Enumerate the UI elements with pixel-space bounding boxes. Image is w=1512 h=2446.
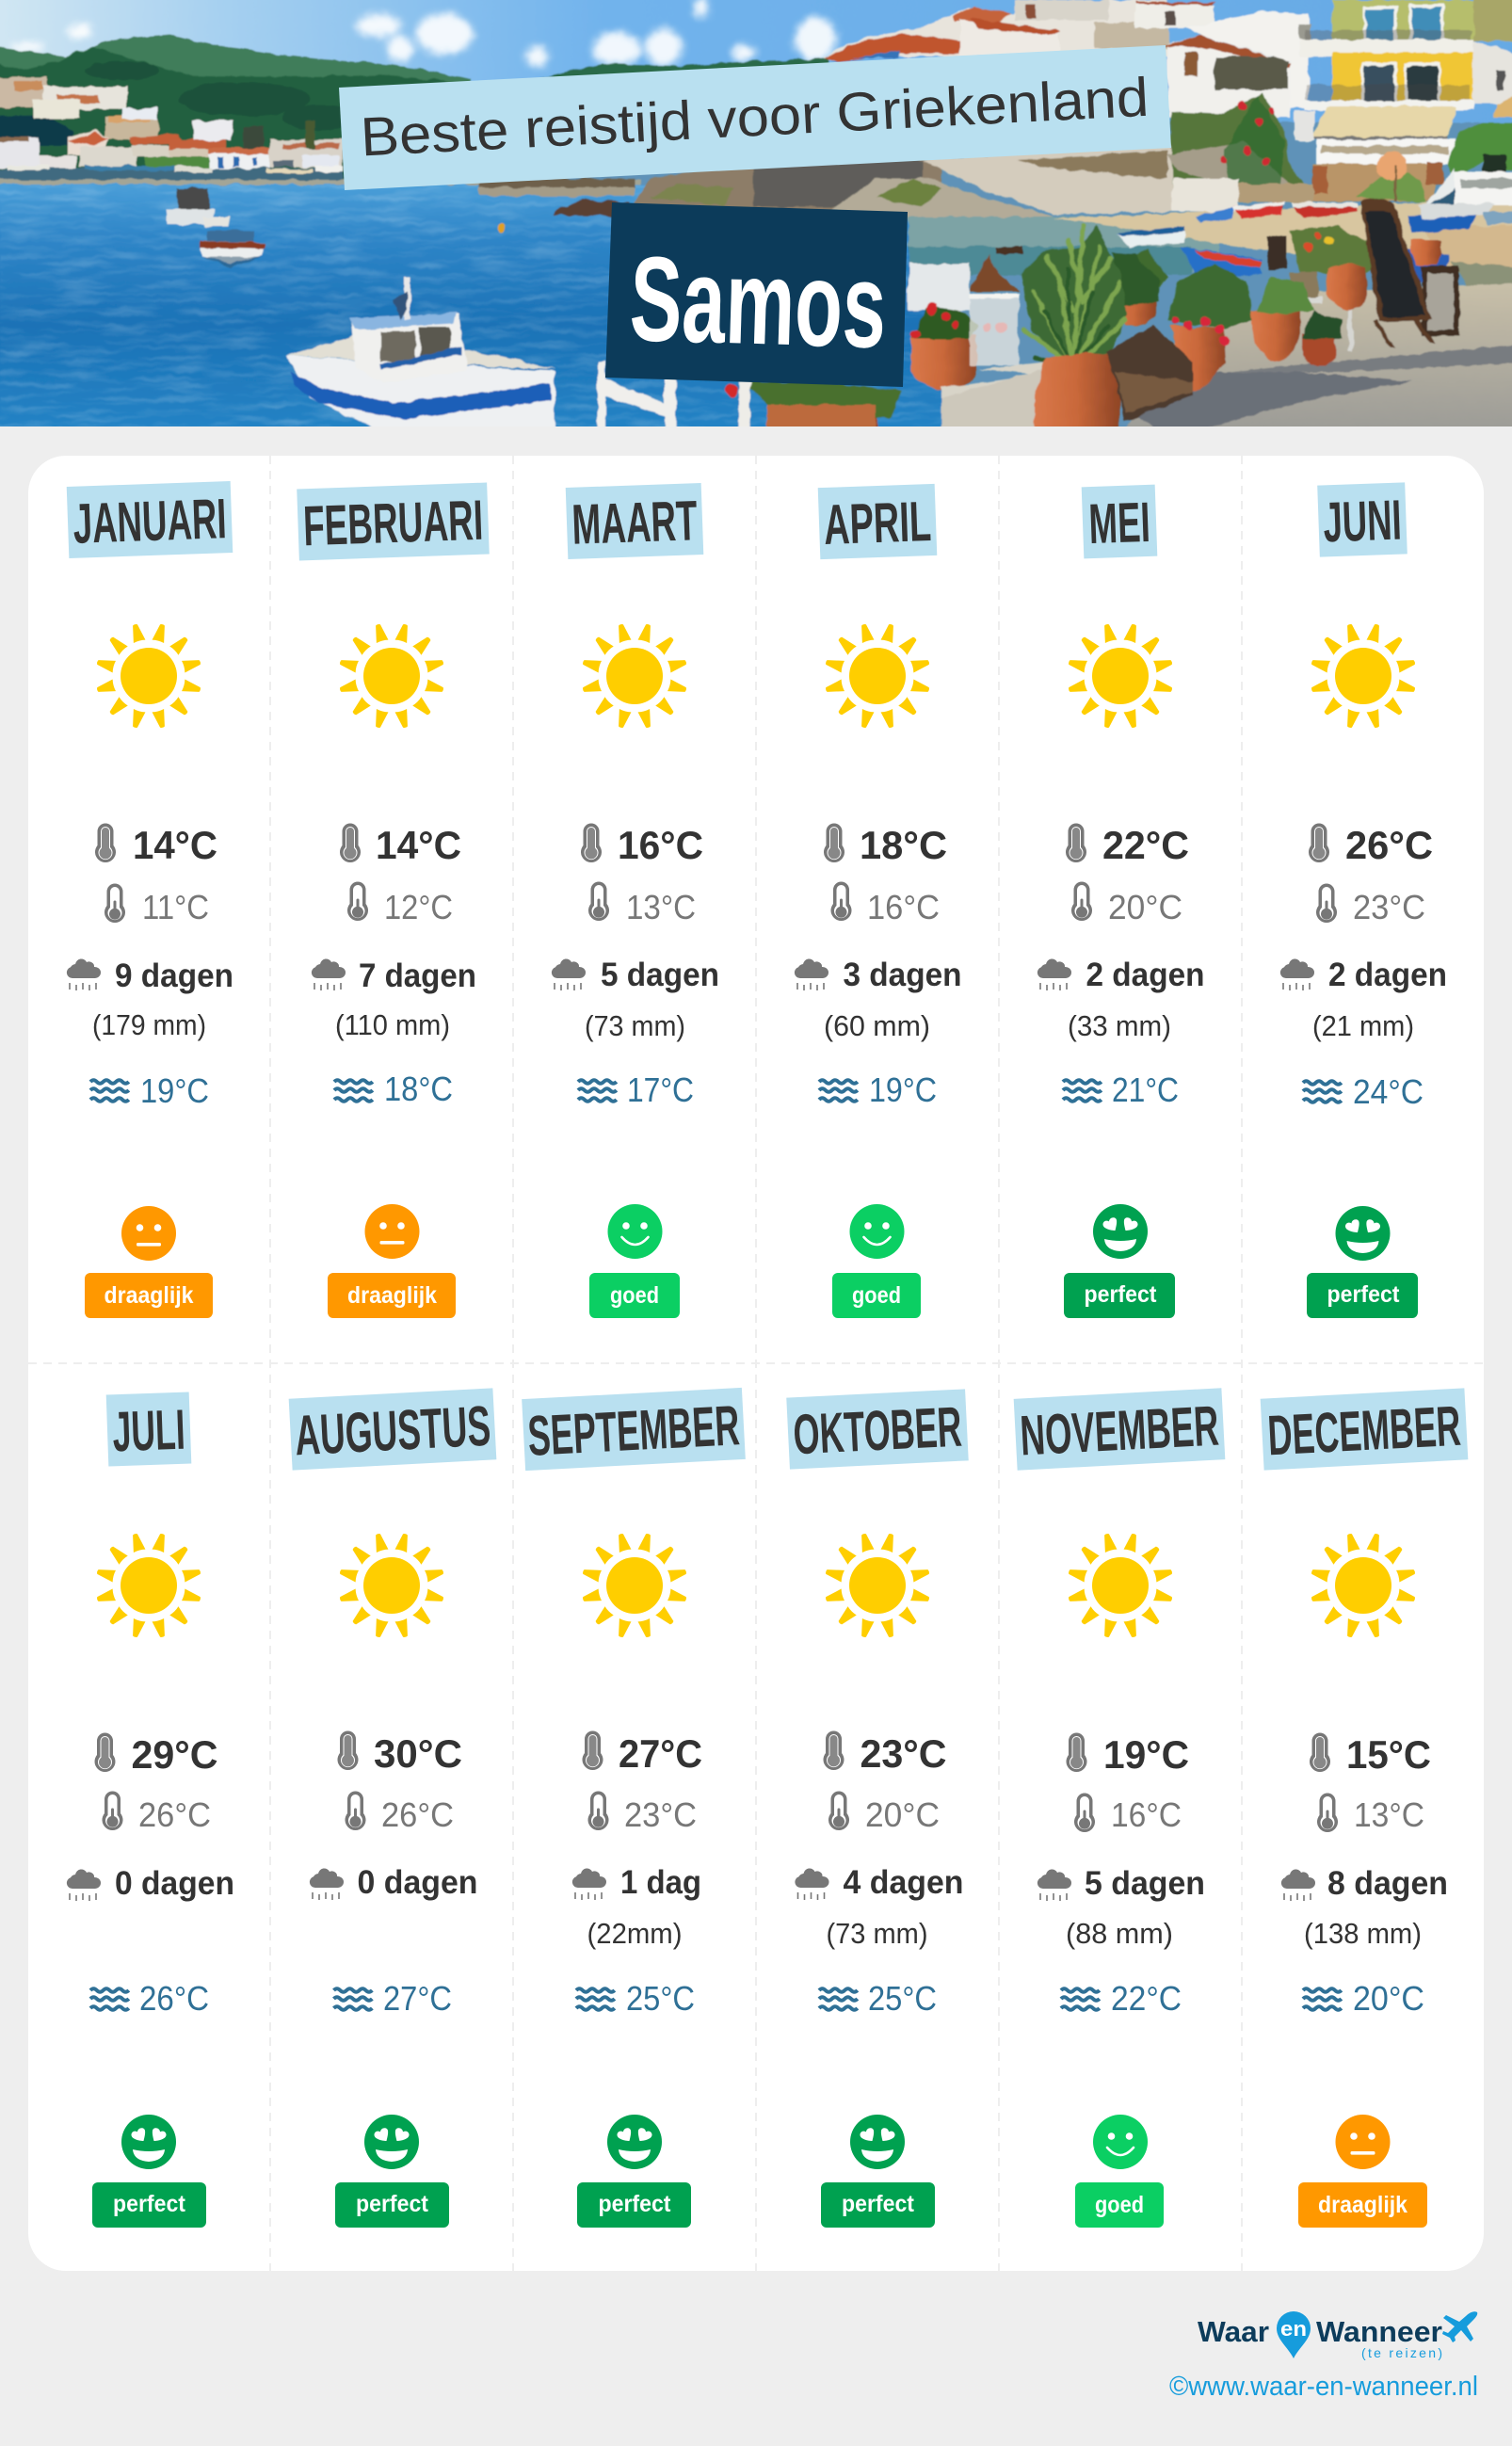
month: Augustus xyxy=(289,1388,496,2228)
badge: rating: goed xyxy=(610,1282,659,1309)
title: Samos: Samos xyxy=(628,232,888,374)
heading: September xyxy=(522,1388,746,1471)
heading: Maart xyxy=(566,483,703,559)
lantern xyxy=(970,254,1020,292)
rainfall: (88 mm) xyxy=(1066,1917,1173,1950)
heading: Maart: MAART xyxy=(571,489,699,556)
badge: rating xyxy=(85,1273,213,1318)
heading: Juni xyxy=(1317,482,1407,557)
icon: sun xyxy=(1068,1533,1173,1638)
badge: rating: perfect xyxy=(842,2191,915,2217)
sea temperature xyxy=(1303,1072,1424,1111)
sea temperature xyxy=(1303,1979,1424,2018)
pavement xyxy=(1120,282,1512,438)
heading: Mei: MEI xyxy=(1087,491,1151,555)
shore middle xyxy=(479,179,635,188)
day temperature xyxy=(1310,1732,1431,1777)
rain days xyxy=(67,957,233,994)
night temperature: 13°C xyxy=(626,888,696,926)
night temperature: 26°C xyxy=(138,1795,211,1834)
icon: location pin xyxy=(1277,2311,1311,2358)
heading: Oktober xyxy=(786,1389,969,1470)
yellow building xyxy=(1332,0,1473,43)
sea temperature xyxy=(90,1979,209,2018)
rainfall: (33 mm) xyxy=(1068,1009,1171,1042)
icon: rating face xyxy=(121,2115,176,2169)
rainfall: (60 mm) xyxy=(824,1009,930,1042)
sea temperature xyxy=(334,1070,453,1108)
night temperature: 20°C xyxy=(865,1795,940,1834)
day temperature xyxy=(823,1730,947,1776)
night temperature: 23°C xyxy=(1353,888,1425,926)
rain days: 5 dagen xyxy=(601,957,719,993)
icon: rating face xyxy=(607,2115,662,2169)
icon: rating face xyxy=(608,1204,663,1259)
icon: rating face xyxy=(121,1206,176,1261)
badge: rating: draaglijk xyxy=(347,1282,437,1309)
rainfall: (110 mm) xyxy=(335,1008,450,1041)
night temperature: 11°C xyxy=(142,888,209,926)
night temperature xyxy=(345,1791,454,1834)
icon: sun xyxy=(96,1533,201,1638)
day temperature: 16°C xyxy=(618,823,703,867)
icon: rating face xyxy=(850,2115,905,2169)
sea temperature xyxy=(90,1071,209,1110)
icon: rating face xyxy=(849,1204,904,1259)
badge: rating: goed xyxy=(1095,2192,1144,2218)
garden slope xyxy=(1169,92,1305,185)
day temperature: 18°C xyxy=(860,823,947,867)
geraniums xyxy=(911,306,979,339)
night temperature xyxy=(1316,883,1425,926)
sea xyxy=(0,185,941,439)
sea temperature xyxy=(578,1070,694,1109)
rain days xyxy=(67,1865,234,1902)
rain days xyxy=(310,1864,478,1901)
month: November xyxy=(1014,1388,1225,2228)
night temperature: 12°C xyxy=(384,888,453,926)
badge: rating xyxy=(1307,1273,1418,1318)
rain days: 1 dag xyxy=(620,1864,701,1901)
badge: rating xyxy=(92,2182,206,2228)
white chair xyxy=(598,361,676,436)
icon: sun xyxy=(339,1533,444,1638)
month: Juli xyxy=(67,1392,234,2228)
badge: rating xyxy=(1075,2182,1164,2228)
rain days: 3 dagen xyxy=(844,957,962,993)
sea temperature: 21°C xyxy=(1112,1070,1179,1109)
big pot xyxy=(1035,353,1119,438)
rain days xyxy=(795,957,962,993)
heading: Februari: FEBRUARI xyxy=(302,489,484,557)
day temperature xyxy=(1066,1732,1189,1777)
icon: sun xyxy=(825,1533,930,1638)
night temperature xyxy=(102,1791,211,1834)
night temperature: 16°C xyxy=(1111,1795,1182,1834)
heading: Oktober: OKTOBER xyxy=(792,1395,963,1466)
badge: rating: perfect xyxy=(356,2191,429,2217)
icon: plane xyxy=(1442,2311,1477,2342)
night temperature xyxy=(347,881,453,926)
footer url: ©www.waar-en-wanneer.nl xyxy=(1169,2372,1478,2402)
month: Maart xyxy=(552,483,719,1318)
sea temperature: 24°C xyxy=(1353,1072,1424,1111)
rainfall: (22mm) xyxy=(587,1917,682,1950)
night temperature: 20°C xyxy=(1108,888,1182,926)
month: Januari xyxy=(67,481,233,1318)
badge: rating xyxy=(821,2182,935,2228)
night temperature: 13°C xyxy=(1354,1795,1424,1834)
icon: rating face xyxy=(1335,2115,1390,2169)
day temperature xyxy=(582,1730,702,1776)
icon: rating face xyxy=(365,1204,420,1259)
heading: Augustus: AUGUSTUS xyxy=(293,1394,492,1467)
blackboard xyxy=(1360,199,1431,322)
bay xyxy=(909,217,1219,273)
logo: Waar en Wanneer: (te reizen) xyxy=(1361,2345,1442,2360)
month: September xyxy=(522,1388,746,2228)
sea temperature: 18°C xyxy=(384,1070,453,1108)
heading: Juli: JULI xyxy=(111,1398,186,1463)
rain days xyxy=(552,957,719,993)
day temperature: 22°C xyxy=(1102,823,1189,867)
logo: Waar en Wanneer xyxy=(1198,2311,1477,2360)
day temperature xyxy=(94,1732,218,1777)
day temperature xyxy=(95,823,217,867)
oleander plant xyxy=(1021,226,1127,370)
big plants xyxy=(1167,264,1252,330)
heading: November: NOVEMBER xyxy=(1019,1394,1220,1467)
panel: months card xyxy=(28,456,1484,2271)
heading: Mei xyxy=(1082,485,1157,558)
photo: harbour of Samos xyxy=(0,0,1512,439)
night temperature xyxy=(828,1791,940,1834)
icon: sun xyxy=(1311,623,1416,729)
badge: rating xyxy=(589,1273,680,1318)
night temperature xyxy=(1317,1793,1424,1834)
beached boats xyxy=(1196,207,1233,222)
heading: Juni: JUNI xyxy=(1322,489,1403,554)
day temperature: 14°C xyxy=(376,823,461,867)
rain days: 9 dagen xyxy=(115,957,233,994)
vine and white fence xyxy=(1447,122,1512,173)
badge: rating: draaglijk xyxy=(104,1282,194,1309)
icon: sun xyxy=(1311,1533,1416,1638)
sea temperature xyxy=(1063,1070,1179,1109)
plants background xyxy=(1288,224,1373,275)
day temperature xyxy=(340,823,461,867)
badge: rating: goed xyxy=(852,1282,901,1309)
badge: rating: perfect xyxy=(599,2191,671,2217)
rainfall: (21 mm) xyxy=(1312,1009,1414,1042)
rainfall: (179 mm) xyxy=(92,1008,206,1041)
icon: location pin: en xyxy=(1280,2317,1307,2341)
sea temperature: 25°C xyxy=(626,1979,695,2018)
icon: sun xyxy=(339,623,444,729)
badge: rating: draaglijk xyxy=(1318,2192,1407,2218)
month: Mei xyxy=(1037,485,1205,1318)
balustrade xyxy=(1316,139,1456,164)
rain days: 0 dagen xyxy=(115,1865,234,1902)
sea temperature: 25°C xyxy=(868,1979,937,2018)
heading: Februari xyxy=(297,482,490,561)
logo: Waar en Wanneer: Waar xyxy=(1198,2315,1269,2348)
banner: subtitle xyxy=(339,45,1171,190)
sea temperature: 27°C xyxy=(383,1979,452,2018)
houses top right xyxy=(825,0,1167,59)
badge: rating: perfect xyxy=(1327,1281,1400,1308)
day temperature: 30°C xyxy=(374,1731,462,1776)
rain days: 8 dagen xyxy=(1327,1865,1448,1902)
day temperature: 26°C xyxy=(1345,823,1433,867)
icon: sun xyxy=(825,623,930,729)
heading: September: SEPTEMBER xyxy=(526,1393,741,1468)
rainfall: (73 mm) xyxy=(585,1009,685,1042)
rainfall: (73 mm) xyxy=(827,1917,928,1950)
small boats xyxy=(166,188,231,226)
night temperature: 16°C xyxy=(867,888,940,926)
rain days xyxy=(572,1864,701,1901)
rain days: 0 dagen xyxy=(358,1864,478,1901)
month: December xyxy=(1261,1388,1468,2228)
heading: April: APRIL xyxy=(823,490,932,556)
day temperature xyxy=(581,823,703,867)
sea temperature: 20°C xyxy=(1353,1979,1424,2018)
day temperature: 29°C xyxy=(132,1732,218,1777)
day temperature: 23°C xyxy=(861,1731,947,1776)
sea temperature: 17°C xyxy=(627,1070,694,1109)
sea temperature: 19°C xyxy=(869,1070,937,1109)
rain days: 5 dagen xyxy=(1085,1865,1205,1902)
night temperature xyxy=(105,883,209,926)
heading: Augustus xyxy=(289,1388,496,1471)
sea temperature xyxy=(1061,1979,1182,2018)
badge: rating xyxy=(832,1273,921,1318)
badge: rating xyxy=(328,1273,456,1318)
month: Juni xyxy=(1280,482,1447,1318)
month: April xyxy=(795,484,962,1318)
logo: Waar en Wanneer: Wanneer xyxy=(1316,2315,1442,2348)
day temperature: 27°C xyxy=(619,1731,702,1776)
town left xyxy=(0,77,47,107)
rocks and stone wall xyxy=(633,160,943,209)
rain days: 4 dagen xyxy=(844,1864,964,1901)
sea temperature: 22°C xyxy=(1111,1979,1182,2018)
day temperature: 15°C xyxy=(1346,1732,1431,1777)
icon: rating face xyxy=(1093,2115,1148,2169)
icon: sun xyxy=(1068,623,1173,729)
night temperature xyxy=(587,1791,697,1834)
icon: rating face xyxy=(364,2115,419,2169)
rain days xyxy=(1280,957,1447,993)
night temperature xyxy=(1074,1793,1182,1834)
awning xyxy=(1312,106,1456,137)
rain days: 2 dagen xyxy=(1328,957,1447,993)
day temperature xyxy=(1066,823,1189,867)
badge: rating xyxy=(1298,2182,1427,2228)
heading: Januari: JANUARI xyxy=(72,487,228,555)
beach xyxy=(1054,201,1512,267)
rain days xyxy=(1037,957,1205,993)
rain days xyxy=(312,957,476,994)
badge: rating xyxy=(577,2182,691,2228)
month: Februari xyxy=(297,482,490,1318)
icon: rating face xyxy=(1335,1206,1390,1261)
rainfall: (138 mm) xyxy=(1304,1917,1422,1950)
day temperature: 19°C xyxy=(1103,1732,1189,1777)
title: Samos xyxy=(605,202,908,387)
sea temperature: 19°C xyxy=(140,1071,209,1110)
sea temperature xyxy=(819,1070,937,1109)
icon: sun xyxy=(582,623,687,729)
icon: sun xyxy=(582,1533,687,1638)
sea temperature xyxy=(819,1979,937,2018)
sea temperature xyxy=(333,1979,452,2018)
pots xyxy=(1411,240,1441,265)
night temperature xyxy=(588,881,696,926)
sea temperature xyxy=(576,1979,695,2018)
icon: rating face xyxy=(1093,1204,1148,1259)
badge: rating: perfect xyxy=(113,2191,186,2217)
day temperature: 14°C xyxy=(133,823,217,867)
main boat xyxy=(287,278,555,438)
rain days: 2 dagen xyxy=(1086,957,1205,993)
heading: Juli xyxy=(106,1392,191,1467)
night temperature: 23°C xyxy=(624,1795,697,1834)
rain days xyxy=(795,1864,964,1901)
heading: November xyxy=(1014,1388,1225,1471)
heading: April xyxy=(818,484,937,559)
month: Oktober xyxy=(786,1389,969,2228)
rain days: 7 dagen xyxy=(359,957,476,994)
night temperature xyxy=(830,881,940,926)
planter under title xyxy=(744,381,902,419)
icon: sun xyxy=(96,623,201,729)
below terrace xyxy=(1294,111,1314,141)
sea temperature: 26°C xyxy=(139,1979,209,2018)
banner: subtitle: Beste reistijd voor Griekenland xyxy=(359,67,1150,168)
night temperature xyxy=(1071,881,1182,926)
heading: Januari xyxy=(67,481,233,558)
badge: rating xyxy=(335,2182,449,2228)
chest xyxy=(1106,325,1193,422)
night temperature: 26°C xyxy=(381,1795,454,1834)
badge: rating: perfect xyxy=(1085,1281,1157,1308)
badge: rating xyxy=(1064,1273,1175,1318)
